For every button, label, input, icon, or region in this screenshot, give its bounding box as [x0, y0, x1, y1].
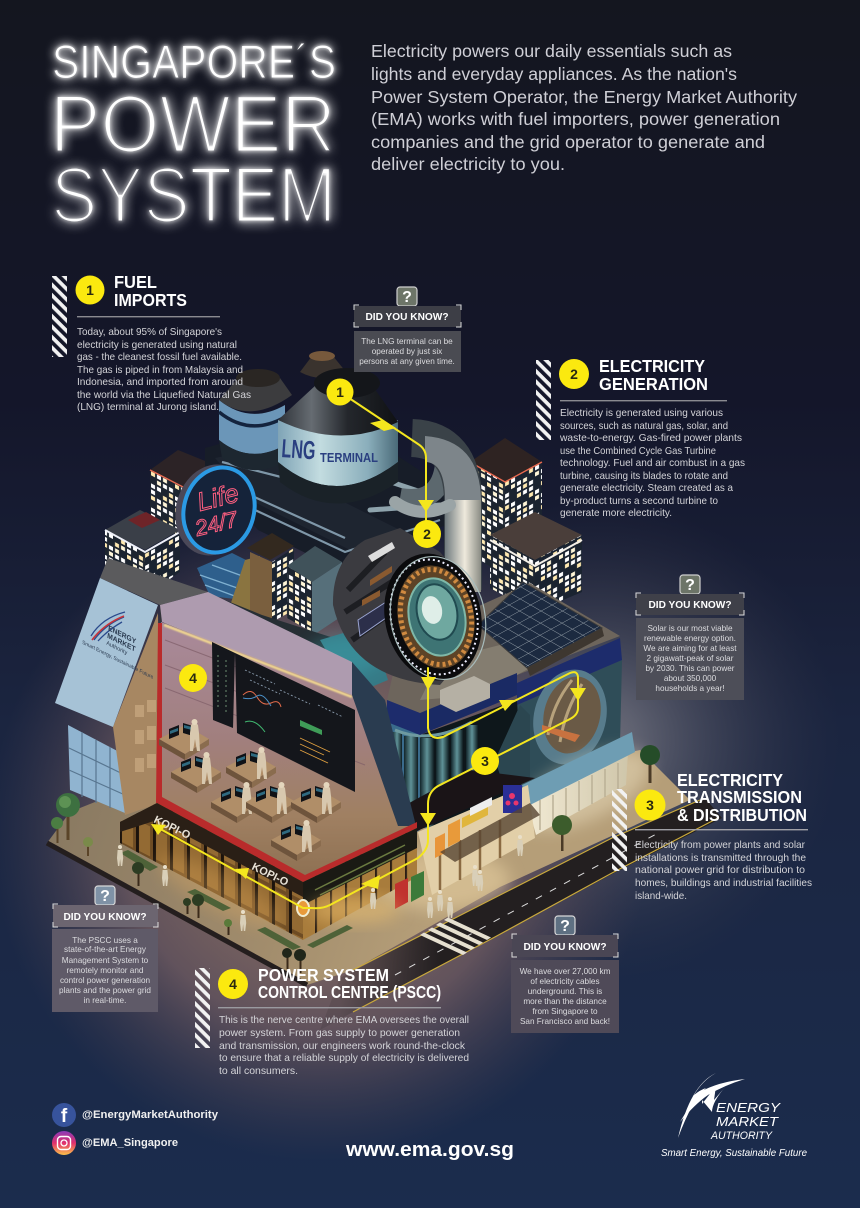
body text: homes, buildings and industrial facilities	[635, 878, 812, 889]
storefront signs: KOPI-O	[152, 814, 192, 842]
route marker 2	[413, 520, 441, 548]
roof panel with EMA sign: Smart Energy, Sustainable Future	[82, 640, 154, 681]
tank: secondary rear cone	[300, 351, 346, 378]
route marker 4	[179, 664, 207, 692]
body text: to all consumers.	[219, 1066, 298, 1077]
callout: PSCC fact: in real-time.	[84, 996, 126, 1005]
body text: The gas is piped in from Malaysia and	[77, 365, 243, 376]
turbine hall deck with machinery	[385, 583, 620, 835]
wall screens	[212, 642, 355, 792]
pedestrians	[117, 835, 523, 931]
body text	[77, 327, 251, 413]
heading: ELECTRICITY	[599, 356, 705, 376]
large elbow pipe	[395, 436, 481, 592]
callout: cables fact	[511, 916, 619, 1033]
callout: solar fact: households a year!	[655, 684, 725, 693]
tank lettering: TERMINAL	[320, 450, 378, 465]
pavement and ground plane	[47, 750, 690, 985]
badge 2: 2	[570, 366, 578, 382]
roof panel with EMA sign: MARKET	[107, 631, 137, 654]
badge 1	[76, 276, 104, 304]
body text: turbine, causing its blades to rotate and	[560, 471, 728, 482]
tank: main LNG terminal	[278, 368, 398, 504]
body text: Electricity is generated using various	[560, 408, 723, 419]
question icon: ?	[402, 289, 412, 306]
callout: cables fact: We have over 27,000 km	[520, 967, 611, 976]
body text: national power grid for distribution to	[635, 865, 805, 876]
red edge strip	[156, 623, 417, 883]
heading: GENERATION	[599, 374, 708, 394]
heading	[677, 770, 807, 825]
heading: CONTROL CENTRE (PSCC)	[258, 982, 441, 1002]
generator turbine	[333, 528, 497, 690]
street trees and planters	[51, 745, 660, 973]
route marker 1: 1	[336, 384, 344, 400]
route marker 3: 3	[481, 753, 489, 769]
main title: SYSTEM	[51, 150, 336, 239]
callout: PSCC fact: Management System to	[62, 956, 149, 965]
turbine cutaway	[523, 662, 617, 772]
body text: to ensure that a reliable supply of electricity is delivered	[219, 1053, 469, 1064]
body text: Indonesia, and imported from around	[77, 377, 243, 388]
callout: solar fact: Solar is our most viable	[647, 624, 733, 633]
social: Facebook: @EnergyMarketAuthority	[82, 1109, 219, 1121]
callout: LNG terminal fact: DID YOU KNOW?	[366, 311, 448, 323]
tank: left storage	[219, 369, 292, 470]
panel: electricity transmission and distribution	[612, 770, 812, 902]
EMA logo: Smart Energy, Sustainable Future	[661, 1147, 807, 1159]
back buildings left	[105, 450, 215, 596]
callout: solar fact: 2 gigawatt-peak of solar	[647, 654, 734, 663]
right teal building with cutaway	[509, 638, 661, 847]
main title: SINGAPORE´S	[52, 35, 336, 88]
heading: POWER SYSTEM	[258, 965, 389, 985]
main title	[50, 35, 336, 239]
panel: power system control centre	[195, 965, 469, 1077]
callout: LNG terminal fact: The LNG terminal can be	[361, 337, 453, 346]
LNG plant base and pipework	[205, 412, 452, 572]
intro paragraph: deliver electricity to you.	[371, 154, 565, 174]
callout: LNG terminal fact: persons at any given time.	[359, 357, 455, 366]
callout: LNG terminal fact	[354, 287, 461, 372]
heading: IMPORTS	[114, 290, 187, 310]
roof panel with EMA sign: Authority	[106, 640, 128, 657]
intro paragraph: lights and everyday appliances. As the nation's	[371, 64, 737, 84]
yellow route: turbine to transmission	[151, 668, 586, 908]
callout: cables fact: from Singapore to	[532, 1007, 598, 1016]
intro paragraph: Electricity powers our daily essentials such as	[371, 41, 732, 61]
callout: PSCC fact: control power generation	[60, 976, 151, 985]
body text	[219, 1015, 469, 1077]
EMA logo: AUTHORITY	[710, 1130, 773, 1142]
EMA logo: ENERGY	[716, 1100, 782, 1115]
logo swoosh	[678, 1073, 745, 1138]
badge 4	[218, 969, 248, 999]
callout: PSCC fact: state-of-the-art Energy	[64, 945, 147, 954]
body text: the world via the Liquefied Natural Gas	[77, 390, 251, 401]
callout: PSCC fact: plants and the power grid	[59, 986, 151, 995]
body text: Today, about 95% of Singapore's	[77, 327, 222, 338]
callout: PSCC fact: DID YOU KNOW?	[64, 911, 146, 923]
body text	[635, 840, 812, 902]
node ring on route	[297, 900, 309, 916]
tank lettering: LNG	[281, 433, 317, 465]
body text: Electricity from power plants and solar	[635, 840, 806, 851]
EMA logo: MARKET	[716, 1114, 779, 1129]
storefront signs: KOPI-O	[250, 861, 290, 889]
control room wall and floor	[158, 622, 417, 880]
heading	[258, 965, 441, 1002]
route marker 4: 4	[189, 670, 197, 686]
callout: solar fact: by 2030. This can power	[645, 664, 735, 673]
social: Facebook: f	[61, 1106, 68, 1127]
body text: technology. Fuel and air combust in a gas	[560, 458, 745, 469]
body text: by-product turns a second turbine to	[560, 496, 718, 507]
heading: FUEL	[114, 272, 157, 292]
route marker 1	[326, 378, 354, 406]
panel: fuel imports	[52, 272, 251, 413]
body text: island-wide.	[635, 891, 687, 902]
callout: PSCC fact: The PSCC uses a	[72, 936, 138, 945]
panel: electricity generation	[536, 356, 745, 519]
body text: installations is transmitted through the	[635, 853, 806, 864]
blue support and mid buildings	[197, 533, 388, 695]
tan side wall	[113, 613, 160, 815]
body text	[559, 408, 745, 519]
intro paragraph	[371, 41, 797, 174]
callout: LNG terminal fact: operated by just six	[372, 347, 442, 356]
parapet	[160, 592, 358, 700]
control room desks and staff	[159, 719, 341, 861]
storefront signs	[152, 814, 290, 889]
callout: cables fact: DID YOU KNOW?	[524, 941, 606, 953]
body text: waste-to-energy. Gas-fired power plants	[559, 433, 742, 444]
yellow route: LNG to turbine	[340, 392, 434, 520]
callout: cables fact: more than the distance	[523, 997, 607, 1006]
body text: use the Combined Cycle Gas Turbine	[560, 446, 716, 457]
route marker 3	[471, 747, 499, 775]
shops under canopy	[400, 770, 540, 895]
question icon: ?	[100, 888, 110, 905]
isometric city illustration	[47, 351, 722, 1030]
heading	[599, 356, 708, 394]
callout: PSCC fact: remotely monitor and	[67, 966, 144, 975]
callout: cables fact: San Francisco and back!	[520, 1017, 610, 1026]
social: Facebook	[52, 1103, 219, 1127]
question icon: ?	[560, 918, 570, 935]
heading: & DISTRIBUTION	[677, 805, 807, 825]
sign: Life 24/7	[165, 456, 264, 564]
callout: solar fact: renewable energy option.	[644, 634, 736, 643]
roof panel with EMA sign: ENERGY	[108, 623, 137, 646]
callout: solar fact: about 350,000	[664, 674, 717, 683]
body text: power system. From gas supply to power generation	[219, 1028, 460, 1039]
heading: TRANSMISSION	[677, 787, 802, 807]
social: Instagram: @EMA_Singapore	[82, 1137, 178, 1149]
storefront: right	[303, 828, 424, 940]
PSCC building	[55, 558, 424, 940]
callout: cables fact: underground. This is	[528, 987, 602, 996]
badge 3	[634, 790, 666, 820]
callout: solar fact	[636, 575, 744, 700]
route marker 2: 2	[423, 526, 431, 542]
callout: PSCC fact	[52, 886, 158, 1012]
left glass tower	[68, 725, 125, 813]
roof	[100, 558, 208, 605]
badge 3: 3	[646, 797, 654, 813]
back buildings right	[470, 438, 582, 612]
storefront: left	[120, 803, 303, 940]
badge 2	[559, 359, 589, 389]
intro paragraph: (EMA) works with fuel importers, power generation	[371, 109, 780, 129]
question icon: ?	[685, 577, 695, 594]
heading: ELECTRICITY	[677, 770, 783, 790]
heading	[114, 272, 187, 310]
roof panel with EMA sign	[55, 578, 158, 727]
body text: generate electricity. Steam created as a	[560, 483, 733, 494]
website: www.ema.gov.sg	[345, 1139, 514, 1161]
callout: solar fact: We are aiming for at least	[643, 644, 737, 653]
body text: electricity is generated using natural	[77, 340, 237, 351]
intro paragraph: companies and the grid operator to generate and	[371, 132, 765, 152]
main title: POWER	[50, 79, 336, 170]
callout: cables fact: of electricity cables	[530, 977, 600, 986]
social: Instagram	[52, 1131, 178, 1155]
road with crossing	[320, 798, 722, 1030]
callout: solar fact: DID YOU KNOW?	[648, 599, 732, 611]
badge 4: 4	[229, 976, 237, 992]
tank lettering	[281, 433, 378, 465]
body text: and transmission, our engineers work round-the-clock	[219, 1041, 466, 1052]
EMA logo	[661, 1073, 807, 1159]
body text: gas - the cleanest fossil fuel available.	[77, 352, 242, 363]
body text: generate more electricity.	[560, 508, 672, 519]
body text: (LNG) terminal at Jurong island.	[77, 402, 219, 413]
sign: Life 24/7: Life	[194, 478, 242, 517]
body text: sources, such as natural gas, solar, and	[560, 421, 728, 432]
intro paragraph: Power System Operator, the Energy Market Authority	[371, 87, 797, 107]
body text: This is the nerve centre where EMA oversees the overall	[219, 1015, 469, 1026]
sign: Life 24/7: 24/7	[191, 506, 241, 541]
solar panels	[478, 582, 604, 676]
badge 1: 1	[86, 282, 94, 298]
